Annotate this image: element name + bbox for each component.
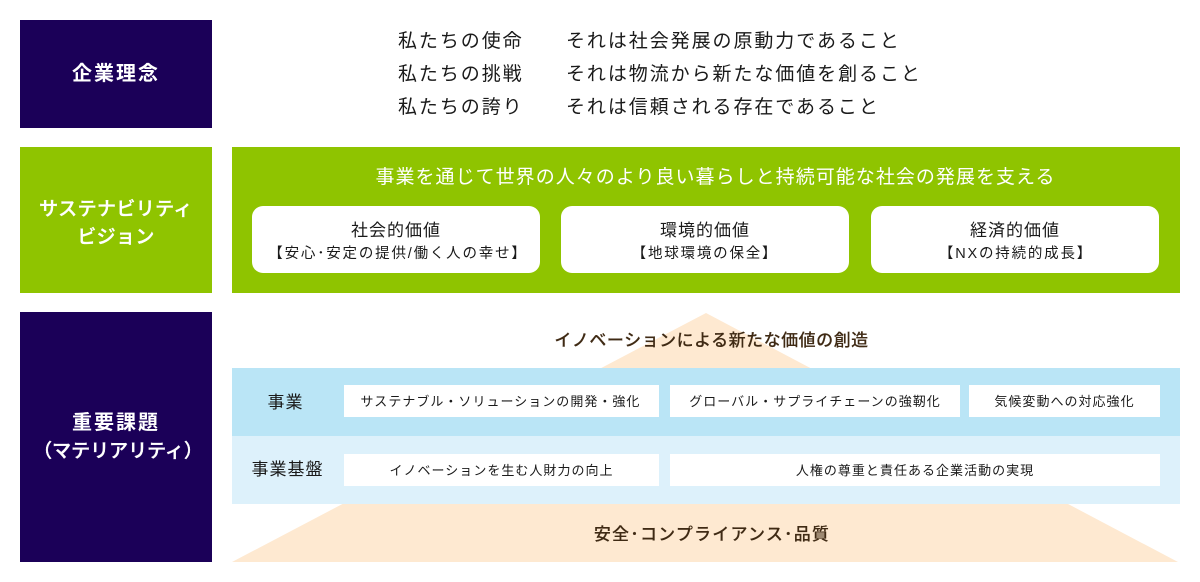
panel: vision bbox=[232, 147, 1180, 293]
text: それは社会発展の原動力であること bbox=[566, 31, 901, 52]
item: sustainable solutions: サステナブル・ソリューションの開発・強化 bbox=[361, 394, 640, 409]
band: business foundation bbox=[232, 436, 1180, 504]
card: social value: 社会的価値 bbox=[351, 221, 441, 240]
item: global supply chain: グローバル・サプライチェーンの強靭化 bbox=[689, 394, 941, 409]
heading: sustainability vision bbox=[20, 147, 212, 293]
text line: mission: 私たちの使命 bbox=[398, 31, 524, 52]
heading: materiality bbox=[20, 312, 212, 562]
card: environmental value: 【地球環境の保全】 bbox=[632, 246, 778, 262]
text line: pride bbox=[398, 97, 880, 118]
card: social value bbox=[252, 206, 540, 273]
safety label: 安全･コンプライアンス･品質 bbox=[594, 525, 830, 544]
item: human rights bbox=[670, 454, 1160, 486]
label: business: 事業 bbox=[268, 392, 304, 412]
innovation label: イノベーションによる新たな価値の創造 bbox=[554, 331, 869, 350]
text: それは物流から新たな価値を創ること bbox=[566, 64, 922, 85]
heading: materiality: （マテリアリティ） bbox=[33, 441, 203, 462]
item: global supply chain bbox=[670, 385, 960, 417]
item: climate change bbox=[969, 385, 1160, 417]
text line: mission bbox=[398, 31, 901, 52]
card: economic value: 経済的価値 bbox=[970, 221, 1060, 240]
text block: mission, challenge, pride bbox=[398, 31, 922, 118]
card: social value: 【安心･安定の提供/働く人の幸せ】 bbox=[268, 246, 528, 262]
heading: sustainability vision: サステナビリティ bbox=[39, 199, 193, 220]
band: business bbox=[232, 368, 1180, 436]
card: economic value bbox=[871, 206, 1159, 273]
heading: sustainability vision: ビジョン bbox=[77, 227, 155, 248]
text line: challenge bbox=[398, 64, 922, 85]
card: environmental value: 環境的価値 bbox=[660, 221, 750, 240]
card: economic value: 【NXの持続的成長】 bbox=[939, 246, 1093, 262]
item: human rights: 人権の尊重と責任ある企業活動の実現 bbox=[796, 463, 1034, 478]
text line: pride: 私たちの誇り bbox=[398, 97, 524, 118]
text: それは信頼される存在であること bbox=[566, 97, 880, 118]
item: sustainable solutions bbox=[344, 385, 659, 417]
item: human capital bbox=[344, 454, 659, 486]
heading: materiality: 重要課題 bbox=[72, 412, 160, 434]
pyramid background bbox=[232, 313, 1178, 562]
heading: corporate philosophy bbox=[20, 20, 212, 128]
item: climate change: 気候変動への対応強化 bbox=[994, 394, 1135, 409]
vision statement: 事業を通じて世界の人々のより良い暮らしと持続可能な社会の発展を支える bbox=[375, 167, 1056, 188]
text line: challenge: 私たちの挑戦 bbox=[398, 64, 524, 85]
label: business foundation: 事業基盤 bbox=[252, 460, 324, 478]
item: human capital: イノベーションを生む人財力の向上 bbox=[389, 463, 614, 478]
card: environmental value bbox=[561, 206, 849, 273]
heading: corporate philosophy: 企業理念 bbox=[72, 62, 160, 84]
